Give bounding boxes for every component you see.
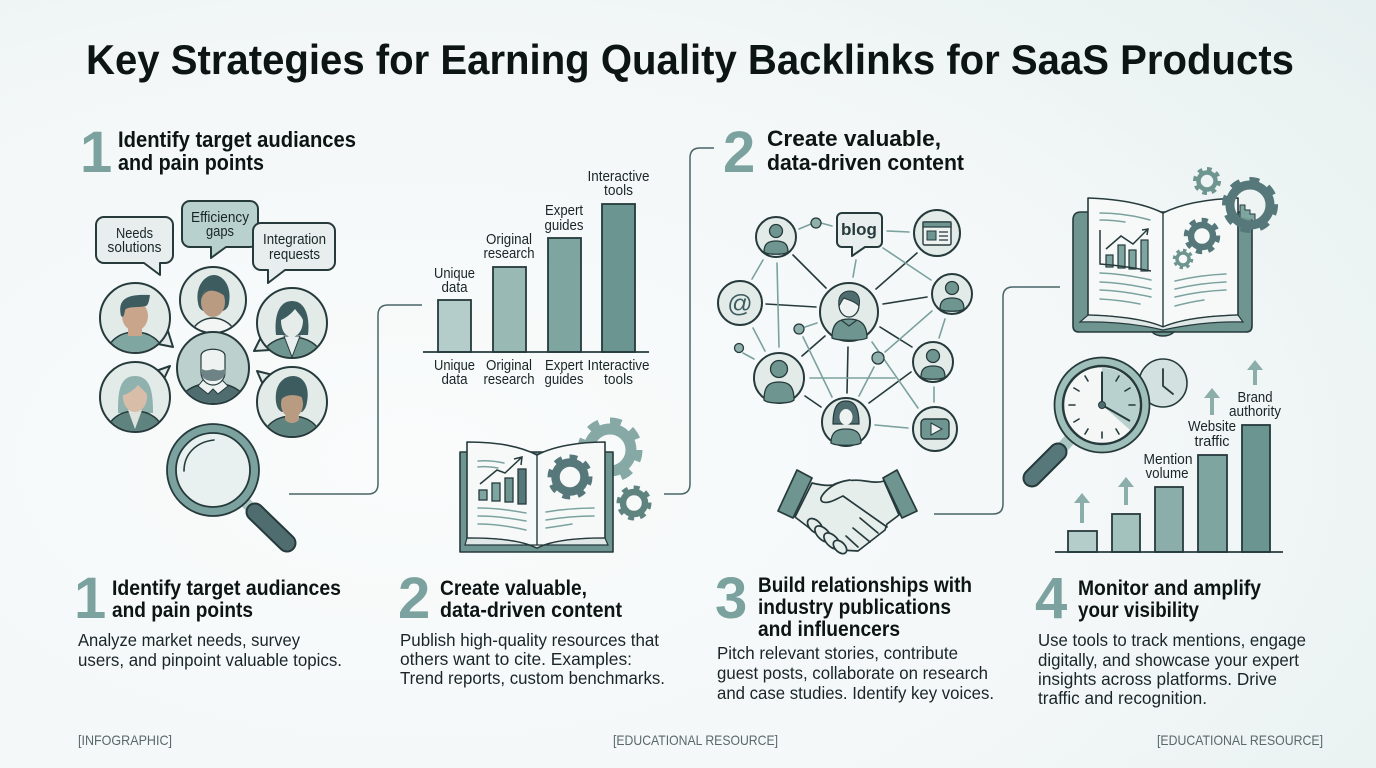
node: at sign: @: [727, 290, 753, 318]
icon: open book with chart and gears: [1073, 169, 1275, 336]
node: person lower right: [913, 342, 953, 382]
step 3 text: guest posts, collaborate on research: [717, 663, 988, 683]
title: Key Strategies for Earning Quality Backlinks for SaaS Products: [86, 36, 1294, 83]
avatar: woman top right: [253, 287, 328, 359]
bar labels: axis: Original: [486, 357, 532, 374]
heading: top step 1: and pain points: [118, 150, 264, 175]
bar labels: [1144, 389, 1281, 482]
bubble: integration requests: Integration: [263, 231, 326, 248]
speech bubbles: audience needs: [96, 201, 335, 283]
bar labels: authority: [1229, 403, 1281, 420]
node: person left: [754, 353, 804, 403]
heading: top step 1: Identify target audiances: [118, 127, 356, 152]
step 1 text: [74, 566, 342, 670]
bar labels: top: data: [442, 279, 468, 296]
footer: [EDUCATIONAL RESOURCE]: [1157, 732, 1323, 748]
heading: top step 1: 1: [80, 120, 112, 185]
bubble: needs solutions: solutions: [108, 239, 162, 256]
bar labels: axis: data: [442, 371, 468, 388]
gears: [1174, 169, 1275, 268]
bubble: efficiency gaps: gaps: [206, 223, 234, 240]
bar labels: Mention: [1144, 451, 1192, 468]
node: browser window: [914, 210, 960, 256]
node: central person: [820, 283, 878, 341]
step 4 text: Monitor and amplify: [1078, 577, 1261, 600]
bar labels: axis: tools: [604, 371, 633, 388]
step 2 text: data-driven content: [440, 599, 622, 622]
step 2 text: Trend reports, custom benchmarks.: [400, 668, 665, 688]
bar labels: axis: Expert: [545, 357, 584, 374]
step 4 text: your visibility: [1078, 599, 1199, 622]
bars: [1068, 425, 1270, 552]
node: woman bottom: [822, 398, 870, 446]
step 3 text: 3: [715, 566, 747, 631]
avatar: person lower right: [256, 366, 328, 438]
step 3 text: [715, 566, 994, 703]
bar labels: top: [434, 168, 650, 296]
step 2 text: Publish high-quality resources that: [400, 630, 659, 650]
heading: top step 2: data-driven content: [767, 150, 965, 175]
bar labels: axis: Interactive: [588, 357, 650, 374]
bars: [438, 204, 635, 352]
step 4 text: [1035, 566, 1306, 708]
node: video: [913, 407, 957, 451]
bar labels: axis: Unique: [434, 357, 475, 374]
bubble: needs solutions: Needs: [116, 225, 153, 242]
icon: magnifying glass: [167, 424, 287, 543]
bar labels: top: research: [484, 245, 534, 262]
avatar: woman lower left: [99, 361, 171, 433]
bar labels: Website: [1188, 418, 1236, 435]
bubble: efficiency gaps: Efficiency: [191, 209, 249, 226]
bar labels: top: Expert: [545, 202, 584, 219]
avatar: woman top center: [179, 266, 247, 332]
bar labels: top: tools: [604, 182, 633, 199]
connector: handshake to book: [934, 287, 1060, 514]
small gear: [619, 488, 649, 518]
growth arrows: [1074, 360, 1263, 523]
bar labels: top: Original: [486, 231, 532, 248]
footer: [INFOGRAPHIC]: [78, 732, 172, 748]
book chart: [479, 457, 526, 504]
avatar: man top left: [99, 282, 174, 354]
connector: book to step 2: [664, 148, 714, 494]
bar labels: Brand: [1238, 389, 1272, 406]
bubble: integration requests: requests: [269, 246, 320, 263]
icon: magnifier with clock: [1032, 358, 1150, 478]
bubble: efficiency gaps: [182, 201, 258, 258]
node: blog bubble: blog: [841, 220, 877, 239]
step 1 text: 1: [74, 566, 106, 631]
step 3 text: Build relationships with: [758, 574, 972, 597]
node: person right: [932, 274, 972, 314]
bar labels: top: guides: [544, 217, 584, 234]
connector: step 1 to chart: [289, 305, 422, 494]
step 1 text: and pain points: [112, 599, 253, 622]
icon: small clock: [1139, 359, 1187, 407]
heading: top step 1: [80, 120, 356, 185]
network diagram: publications and influencers: [718, 210, 972, 451]
step 4 text: insights across platforms. Drive: [1038, 669, 1277, 689]
icon: open book with gears: [460, 422, 649, 552]
heading: top step 2: Create valuable,: [767, 126, 941, 151]
bar labels: axis: [434, 357, 650, 388]
node: at sign: [718, 281, 762, 325]
step 2 text: Create valuable,: [440, 577, 587, 600]
bubble: integration requests: [253, 223, 335, 283]
book chart: [1100, 229, 1151, 271]
bar chart: visibility growth: [1055, 360, 1283, 552]
bar labels: volume: [1146, 465, 1188, 482]
heading: top step 2: 2: [723, 120, 755, 185]
icon: handshake: [778, 470, 917, 556]
avatar: bearded man center: [176, 331, 250, 405]
node: blog bubble: [837, 213, 882, 256]
bar labels: top: Unique: [434, 265, 475, 282]
step 2 text: 2: [398, 566, 430, 631]
bar labels: axis: research: [484, 371, 534, 388]
step 4 text: traffic and recognition.: [1038, 688, 1207, 708]
avatars: audience group: [100, 267, 327, 454]
large gear behind: [582, 422, 638, 478]
bar labels: top: Interactive: [588, 168, 650, 185]
step 3 text: Pitch relevant stories, contribute: [717, 643, 958, 663]
step 2 text: [398, 566, 665, 688]
network links: [743, 223, 945, 428]
step 4 text: 4: [1035, 566, 1067, 631]
step 3 text: industry publications: [758, 596, 951, 619]
bar labels: axis: guides: [544, 371, 584, 388]
step 2 text: others want to cite. Examples:: [400, 649, 632, 669]
step 1 text: Identify target audiances: [112, 577, 341, 600]
step 3 text: and case studies. Identify key voices.: [717, 683, 994, 703]
step 3 text: and influencers: [758, 618, 900, 641]
step 1 text: users, and pinpoint valuable topics.: [78, 650, 342, 670]
bubble: needs solutions: [96, 217, 173, 275]
book gear: [550, 457, 590, 497]
bar chart: content types: [423, 168, 650, 388]
step 4 text: digitally, and showcase your expert: [1038, 650, 1299, 670]
bar labels: traffic: [1194, 433, 1230, 450]
footer: [EDUCATIONAL RESOURCE]: [613, 732, 778, 748]
step 1 text: Analyze market needs, survey: [78, 630, 300, 650]
small nodes: [734, 218, 884, 364]
node: person top left: [756, 217, 796, 257]
step 4 text: Use tools to track mentions, engage: [1038, 630, 1306, 650]
footer: [78, 732, 1323, 748]
heading: top step 2: [723, 120, 965, 185]
